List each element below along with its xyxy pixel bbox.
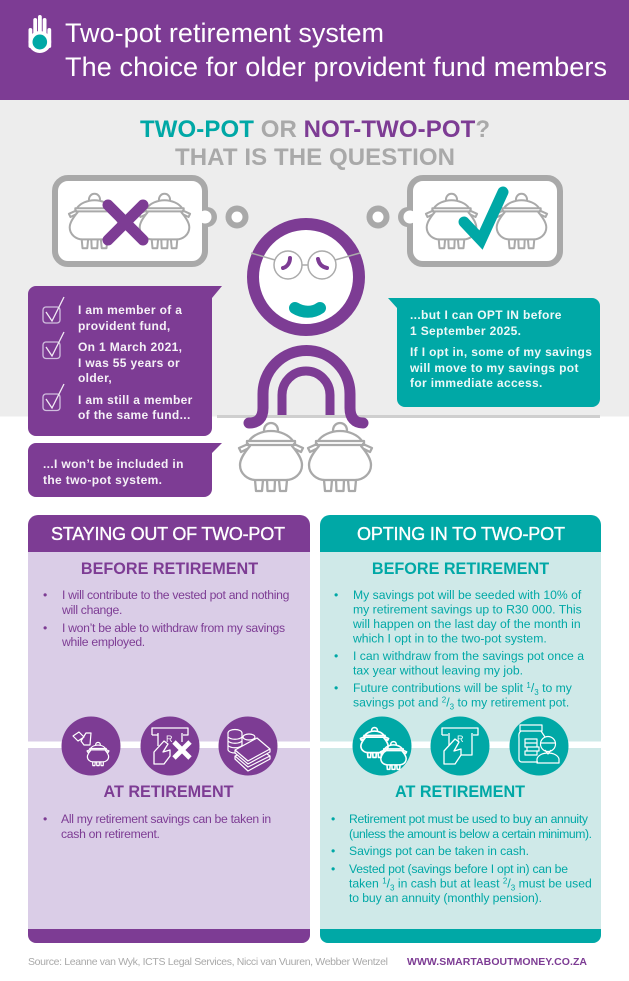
- before retirement: will happen on the last day of the month in: [352, 617, 581, 631]
- before retirement: My savings pot will be seeded with 10% of: [353, 588, 582, 602]
- at retirement: 2: [503, 876, 508, 886]
- character: [249, 224, 363, 423]
- at retirement: •: [331, 844, 335, 858]
- speech bubble: opt in: ...but I can OPT IN before: [410, 308, 562, 322]
- before retirement: /: [531, 681, 535, 695]
- at retirement: AT RETIREMENT: [103, 783, 234, 801]
- before retirement: Future contributions will be split: [353, 681, 523, 695]
- title: The choice for older provident fund members: [65, 52, 607, 82]
- eyes: [283, 258, 327, 268]
- at retirement: Vested pot (savings before I opt in) can be: [349, 862, 568, 876]
- shelf line: [217, 415, 600, 418]
- at retirement: 3: [390, 884, 395, 892]
- before retirement: •: [43, 621, 47, 635]
- speech bubble: not included: the two-pot system.: [43, 473, 162, 487]
- question heading: THAT IS THE QUESTION: [175, 144, 455, 171]
- head: [253, 224, 359, 330]
- website: WWW.SMARTABOUTMONEY.CO.ZA: [407, 956, 587, 968]
- before retirement: to my: [539, 681, 573, 695]
- source note: Source: Leanne van Wyk, ICTS Legal Services, Nicci van Vuuren, Webber Wentzel: [28, 956, 388, 968]
- speech bubble: opt in: If I opt in, some of my savings: [410, 345, 592, 359]
- before retirement: BEFORE RETIREMENT: [372, 560, 549, 578]
- before retirement: 2: [442, 696, 447, 704]
- icon: coins and banknotes: [218, 716, 278, 776]
- at retirement: /: [387, 876, 391, 890]
- question heading: TWO-POT OR NOT-TWO-POT?: [140, 116, 490, 143]
- speech bubble: provident fund conditions: On 1 March 2021,: [78, 340, 182, 354]
- speech bubble: provident fund conditions: I was 55 years or: [78, 356, 180, 370]
- title: [65, 18, 607, 82]
- before retirement: 1: [526, 681, 531, 690]
- speech bubble: not included: ...I won’t be included in: [43, 457, 184, 471]
- at retirement: AT RETIREMENT: [395, 783, 525, 801]
- before retirement: 3: [450, 702, 455, 712]
- at retirement: must be used: [515, 876, 592, 890]
- icon: cross: [108, 205, 143, 240]
- before retirement: my retirement savings up to R30 000. This: [353, 602, 582, 616]
- smile: [295, 308, 320, 312]
- before retirement: /: [446, 696, 450, 710]
- at retirement: to buy an annuity (monthly pension).: [349, 891, 542, 905]
- speech bubble: opt in: 1 September 2025.: [410, 324, 521, 338]
- before retirement: I won’t be able to withdraw from my savings: [62, 621, 285, 635]
- at retirement: [331, 783, 592, 905]
- before retirement: to my retirement pot.: [454, 696, 569, 710]
- icon: two pots: [352, 716, 412, 776]
- icon: hand logo: [28, 15, 51, 53]
- at retirement: Savings pot can be taken in cash.: [349, 844, 529, 858]
- at retirement: 3: [511, 884, 516, 892]
- panel: staying out of two-pot: [28, 515, 310, 943]
- at retirement: •: [331, 862, 335, 876]
- panel heading: OPTING IN TO TWO-POT: [357, 524, 565, 544]
- at retirement: in cash but at least: [394, 876, 503, 890]
- panel heading: STAYING OUT OF TWO-POT: [51, 524, 285, 544]
- speech bubble: provident fund conditions: [28, 286, 222, 436]
- before retirement: [43, 560, 289, 649]
- title: Two-pot retirement system: [65, 18, 384, 48]
- speech bubble: provident fund conditions: I am member of a: [78, 303, 182, 317]
- question heading: [140, 116, 490, 171]
- icon: jar of coins and pensioner: [510, 716, 568, 776]
- thought bubble: not two-pot: [55, 178, 246, 264]
- speech bubble: not included: [28, 443, 222, 497]
- before retirement: will change.: [61, 603, 122, 617]
- at retirement: /: [507, 876, 511, 890]
- before retirement: which I opt in to the two-pot system.: [352, 632, 547, 646]
- before retirement: savings pot and: [353, 696, 438, 710]
- pots under table: [239, 423, 372, 491]
- icon: tick: [464, 192, 503, 240]
- panel: opting in to two-pot: [320, 515, 601, 943]
- icon: ATM withdrawal crossed: [140, 716, 200, 776]
- at retirement: 1: [382, 876, 387, 886]
- speech bubble: provident fund conditions: provident fund,: [78, 319, 171, 333]
- before retirement: •: [334, 681, 338, 695]
- speech bubble: provident fund conditions: I am still a member: [78, 393, 193, 407]
- icon: checkboxes: [43, 297, 64, 410]
- before retirement: BEFORE RETIREMENT: [81, 560, 258, 578]
- header banner: [0, 0, 629, 100]
- at retirement: •: [43, 812, 47, 826]
- before retirement: tax year without leaving my job.: [353, 664, 523, 678]
- at retirement: All my retirement savings can be taken in: [61, 812, 271, 826]
- before retirement: 3: [534, 688, 539, 697]
- at retirement: Retirement pot must be used to buy an annuity: [349, 812, 589, 826]
- speech bubble: provident fund conditions: older,: [78, 371, 112, 385]
- at retirement: •: [331, 812, 335, 826]
- at retirement: [43, 783, 271, 841]
- glasses: [251, 251, 360, 279]
- at retirement: taken: [349, 876, 379, 890]
- icon: hand giving money to pot: [62, 716, 120, 776]
- icon: ATM withdrawal: R: [457, 734, 464, 744]
- before retirement: I can withdraw from the savings pot once a: [353, 649, 584, 663]
- before retirement: •: [334, 588, 338, 602]
- speech bubble: opt in: will move to my savings pot: [409, 361, 579, 375]
- at retirement: (unless the amount is below a certain minimum).: [349, 827, 592, 841]
- thought bubble: two-pot: [370, 178, 560, 264]
- speech bubble: opt in: [388, 298, 600, 407]
- before retirement: •: [43, 588, 47, 602]
- before retirement: I will contribute to the vested pot and nothing: [62, 588, 289, 602]
- speech bubble: provident fund conditions: of the same fund...: [78, 408, 191, 422]
- body: [249, 351, 363, 423]
- before retirement: •: [334, 649, 338, 663]
- icon: ATM withdrawal crossed: R: [166, 734, 173, 744]
- speech bubble: opt in: for immediate access.: [410, 376, 543, 390]
- at retirement: cash on retirement.: [61, 827, 160, 841]
- before retirement: [334, 560, 584, 712]
- before retirement: while employed.: [61, 635, 145, 649]
- icon: ATM withdrawal: [430, 716, 490, 776]
